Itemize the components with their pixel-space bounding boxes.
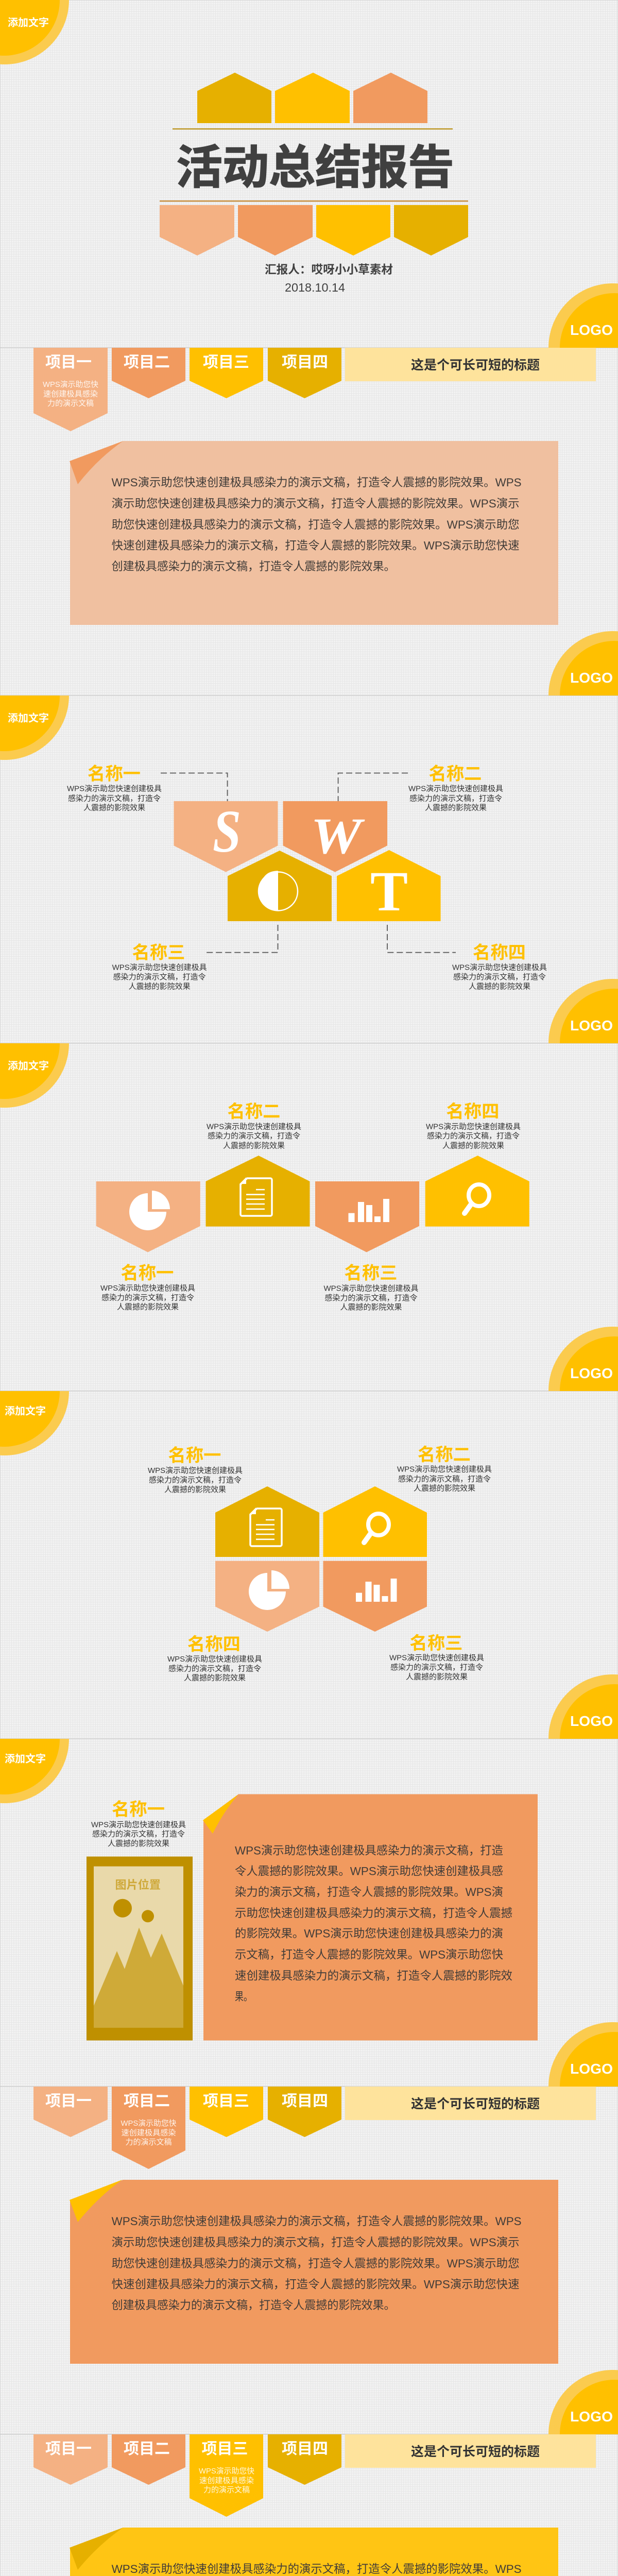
corner badge: add text (0, 0, 69, 64)
slide: SWOT (0, 696, 618, 1043)
label: name four: 名称四 (187, 1635, 241, 1654)
tab: project 1 active: 力的演示文稿 (47, 399, 94, 408)
tab: project 3 active: 力的演示文稿 (203, 2486, 250, 2495)
tab: project 3 (190, 348, 263, 398)
tab: project 2 (112, 348, 185, 398)
label: name two: 名称二 (228, 1102, 280, 1122)
tab: project 2 active: 力的演示文稿 (126, 2138, 172, 2147)
corner badge: add text (0, 696, 69, 760)
label: name four: WPS演示助您快速创建极具 (167, 1655, 262, 1664)
label: name three: 感染力的演示文稿，打造令 (113, 973, 206, 981)
lower pentagon shapes (160, 205, 468, 256)
block: document (206, 1156, 310, 1227)
tab: project 2: 项目二 (124, 2441, 170, 2458)
block: pie chart (215, 1561, 319, 1632)
slide: project one (0, 348, 618, 696)
corner badge: add text (0, 1043, 69, 1108)
upper house shapes (197, 73, 427, 123)
label: name three: WPS演示助您快速创建极具 (323, 1284, 418, 1293)
label: name three: 名称三 (344, 1263, 398, 1283)
label: name two: 感染力的演示文稿，打造令 (398, 1475, 491, 1484)
logo badge: LOGO (570, 322, 613, 338)
block: bar chart (315, 1181, 419, 1252)
picture placeholder (87, 1857, 193, 2040)
label: name one: 人震撼的影院效果 (108, 1839, 169, 1848)
label: name three: 人震撼的影院效果 (406, 1672, 468, 1682)
label: name three: 人震撼的影院效果 (340, 1302, 402, 1312)
lower rule (160, 200, 468, 202)
date: 2018.10.14 (285, 281, 345, 294)
slide: project two (0, 2087, 618, 2434)
label: name four (167, 1635, 262, 1683)
logo badge (548, 283, 618, 348)
heading bar: 这是个可长可短的标题 (411, 2445, 540, 2459)
label: name two: 人震撼的影院效果 (414, 1484, 475, 1493)
corner badge: add text (0, 1391, 69, 1455)
label: name three: WPS演示助您快速创建极具 (389, 1654, 484, 1663)
label: name two (408, 765, 503, 812)
title: 活动总结报告 (176, 142, 454, 194)
panel: text card: 令人震撼的影院效果。WPS演示助您快速创建极具感 (235, 1865, 503, 1877)
label: name three: 感染力的演示文稿，打造令 (390, 1663, 483, 1672)
panel: text card (70, 2528, 558, 2576)
tab: project 3 (190, 2087, 263, 2137)
label: name three (112, 943, 207, 991)
upper rule (173, 128, 453, 130)
logo badge (548, 979, 618, 1043)
SWOT block T (337, 850, 441, 923)
label: name one: 人震撼的影院效果 (117, 1302, 179, 1312)
logo badge (548, 2370, 618, 2434)
label: name one: 感染力的演示文稿，打造令 (68, 794, 161, 803)
label: name one: 名称一 (121, 1263, 174, 1283)
label: name four (426, 1102, 521, 1150)
corner badge: add text (0, 1739, 69, 1803)
presenter: 汇报人：哎呀小小草素材 (265, 263, 393, 276)
heading bar (345, 2434, 596, 2468)
label: name four (452, 943, 547, 991)
label: name four: WPS演示助您快速创建极具 (426, 1123, 521, 1131)
tab: project 2: 项目二 (124, 354, 170, 371)
corner badge: add text: 添加文字 (5, 1405, 46, 1417)
label: name two (207, 1102, 301, 1150)
label: name one: WPS演示助您快速创建极具 (67, 785, 162, 793)
label: name four: 名称四 (446, 1102, 500, 1122)
slide: four steps row (0, 1043, 618, 1391)
label: name four: 名称四 (473, 943, 526, 962)
picture placeholder: 图片位置 (115, 1878, 161, 1891)
block: pie chart (96, 1181, 200, 1252)
panel: text card (70, 2180, 558, 2364)
tab: project 1 (33, 2434, 108, 2485)
tab: project 1 (33, 2087, 108, 2137)
block: document (215, 1486, 319, 1557)
label: name three: 名称三 (132, 943, 185, 962)
panel: text card: WPS演示助您快速创建极具感染力的演示文稿，打造令人震撼的影院效果。WPS (112, 476, 522, 489)
panel: text card: 果。 (235, 1990, 252, 2003)
block: magnifier (425, 1156, 529, 1227)
panel: text card: 示文稿，打造令人震撼的影院效果。WPS演示助您快 (235, 1948, 503, 1961)
panel: text card: 演示助您快速创建极具感染力的演示文稿，打造令人震撼的影院效果。WPS演示 (112, 2236, 520, 2249)
label: name two (397, 1445, 492, 1493)
tab: project 4: 项目四 (282, 354, 328, 371)
label: name four: 感染力的演示文稿，打造令 (427, 1132, 520, 1141)
label: name two: 名称二 (418, 1445, 471, 1465)
label: name three: 人震撼的影院效果 (129, 981, 191, 991)
logo badge: LOGO (570, 670, 613, 686)
logo badge: LOGO (570, 1018, 613, 1033)
label: name three: 感染力的演示文稿，打造令 (324, 1294, 417, 1302)
label: name two: 人震撼的影院效果 (425, 803, 487, 812)
tab: project 4 (268, 348, 341, 398)
slide: four block grid (0, 1391, 618, 1739)
label: name four: 人震撼的影院效果 (469, 981, 530, 991)
tab: project 2 active: 速创建极具感染 (122, 2129, 176, 2137)
label: name one: WPS演示助您快速创建极具 (148, 1466, 243, 1475)
label: name two: 感染力的演示文稿，打造令 (208, 1132, 300, 1141)
label: name one: 感染力的演示文稿，打造令 (149, 1476, 242, 1485)
panel: text card: WPS演示助您快速创建极具感染力的演示文稿，打造 (235, 1844, 503, 1857)
label: name three (323, 1263, 418, 1312)
tab: project 1 active: WPS演示助您快 (43, 380, 98, 389)
label: name one: 感染力的演示文稿，打造令 (92, 1830, 185, 1839)
tab: project 4 (268, 2087, 341, 2137)
label: name one: 名称一 (88, 765, 141, 784)
label: name two: WPS演示助您快速创建极具 (397, 1465, 492, 1474)
label: name three: 名称三 (410, 1634, 462, 1653)
panel: text card: 助您快速创建极具感染力的演示文稿，打造令人震撼的影院效果。WPS演示助您 (112, 518, 520, 531)
panel: text card: 创建极具感染力的演示文稿，打造令人震撼的影院效果。 (112, 2299, 396, 2312)
logo badge (548, 1327, 618, 1391)
tab: project 3 active (190, 2434, 263, 2517)
label: name four: 感染力的演示文稿，打造令 (168, 1665, 261, 1673)
tab: project 1 active: 速创建极具感染 (43, 389, 98, 399)
panel: text card: 的影院效果。WPS演示助您快速创建极具感染力的演 (235, 1927, 503, 1940)
panel: text card: 助您快速创建极具感染力的演示文稿，打造令人震撼的影院效果。WPS演示助您 (112, 2257, 520, 2270)
label: name two: 名称二 (428, 765, 482, 784)
logo badge: LOGO (570, 2409, 613, 2425)
SWOT block S (174, 798, 278, 872)
SWOT block O (228, 851, 332, 923)
label: name one: 人震撼的影院效果 (164, 1485, 226, 1494)
corner badge: add text: 添加文字 (5, 1753, 46, 1765)
block: magnifier (323, 1486, 427, 1557)
connector lines (161, 773, 456, 953)
tab: project 1: 项目一 (45, 2441, 92, 2458)
tab: project 2 active: WPS演示助您快 (121, 2119, 176, 2128)
logo badge: LOGO (570, 2061, 613, 2077)
tab: project 3 active: 项目三 (202, 2441, 248, 2458)
heading bar (345, 2087, 596, 2120)
panel: text card: 快速创建极具感染力的演示文稿，打造令人震撼的影院效果。WPS演示助您快速 (112, 539, 520, 552)
heading bar: 这是个可长可短的标题 (411, 358, 540, 372)
heading bar: 这是个可长可短的标题 (411, 2097, 540, 2111)
tab: project 4: 项目四 (282, 2441, 328, 2458)
block: bar chart (323, 1561, 427, 1632)
logo badge (548, 1674, 618, 1739)
label: name one: 名称一 (112, 1800, 165, 1820)
corner badge: add text: 添加文字 (8, 16, 49, 29)
tab: project 1: 项目一 (45, 2093, 92, 2110)
label: name four: 人震撼的影院效果 (442, 1141, 504, 1150)
panel: text card: 染力的演示文稿，打造令人震撼的影院效果。WPS演 (235, 1886, 503, 1899)
tab: project 4: 项目四 (282, 2093, 328, 2110)
panel: text card: 示助您快速创建极具感染力的演示文稿，打造令人震撼 (235, 1907, 512, 1920)
tab: project 1 active (33, 348, 108, 431)
SWOT block S: S (213, 798, 241, 865)
logo badge: LOGO (570, 1365, 613, 1381)
label: name two: WPS演示助您快速创建极具 (207, 1123, 301, 1131)
logo badge (548, 631, 618, 696)
tab: project 2 (112, 2434, 185, 2485)
panel: text card: 速创建极具感染力的演示文稿，打造令人震撼的影院效 (235, 1969, 512, 1982)
panel: text card: WPS演示助您快速创建极具感染力的演示文稿，打造令人震撼的影院效果。WPS (112, 2215, 522, 2228)
corner badge: add text: 添加文字 (8, 712, 49, 724)
label: name two: 感染力的演示文稿，打造令 (409, 794, 502, 803)
label: name two: WPS演示助您快速创建极具 (408, 785, 503, 793)
label: name three: WPS演示助您快速创建极具 (112, 963, 207, 972)
label: name one: WPS演示助您快速创建极具 (100, 1284, 195, 1293)
logo badge (548, 2022, 618, 2087)
tab: project 4 (268, 2434, 341, 2485)
label: name one (67, 765, 162, 812)
label: name one: 感染力的演示文稿，打造令 (101, 1293, 194, 1302)
logo badge: LOGO (570, 1713, 613, 1729)
tab: project 3: 项目三 (203, 354, 249, 371)
label: name one: WPS演示助您快速创建极具 (91, 1820, 186, 1829)
label: name four: 感染力的演示文稿，打造令 (453, 973, 546, 981)
panel: text card: 演示助您快速创建极具感染力的演示文稿，打造令人震撼的影院效果。WPS演示 (112, 497, 520, 510)
tab: project 3 active: WPS演示助您快 (199, 2467, 254, 2476)
label: name one (148, 1446, 243, 1494)
slide: picture and text (0, 1739, 618, 2087)
tab: project 2 active: 项目二 (124, 2093, 170, 2110)
label: name four: 人震撼的影院效果 (184, 1673, 246, 1683)
heading bar (345, 348, 596, 381)
panel: text card (70, 441, 558, 625)
panel: text card: 创建极具感染力的演示文稿，打造令人震撼的影院效果。 (112, 560, 396, 573)
label: name one (91, 1800, 186, 1848)
label: name one: 人震撼的影院效果 (83, 803, 145, 812)
label: name three (389, 1634, 484, 1682)
label: name two: 人震撼的影院效果 (223, 1141, 285, 1150)
SWOT block O: O (258, 858, 298, 923)
label: name one: 名称一 (168, 1446, 221, 1466)
corner badge: add text: 添加文字 (8, 1060, 49, 1072)
label: name four: WPS演示助您快速创建极具 (452, 963, 547, 972)
tab: project 2 active (112, 2087, 185, 2169)
panel: text card (203, 1794, 538, 2040)
SWOT block T: T (370, 860, 408, 923)
tab: project 1 active: 项目一 (45, 354, 92, 371)
slide: title cover (0, 0, 618, 348)
tab: project 3: 项目三 (203, 2093, 249, 2110)
slide: project three (0, 2434, 618, 2576)
panel: text card: 快速创建极具感染力的演示文稿，打造令人震撼的影院效果。WPS演示助您快速 (112, 2278, 520, 2291)
panel: text card: WPS演示助您快速创建极具感染力的演示文稿，打造令人震撼的影院效果。WPS (112, 2563, 522, 2575)
tab: project 3 active: 速创建极具感染 (199, 2476, 254, 2485)
SWOT block W (283, 801, 387, 872)
SWOT block W: W (311, 807, 365, 865)
label: name one (100, 1263, 195, 1312)
